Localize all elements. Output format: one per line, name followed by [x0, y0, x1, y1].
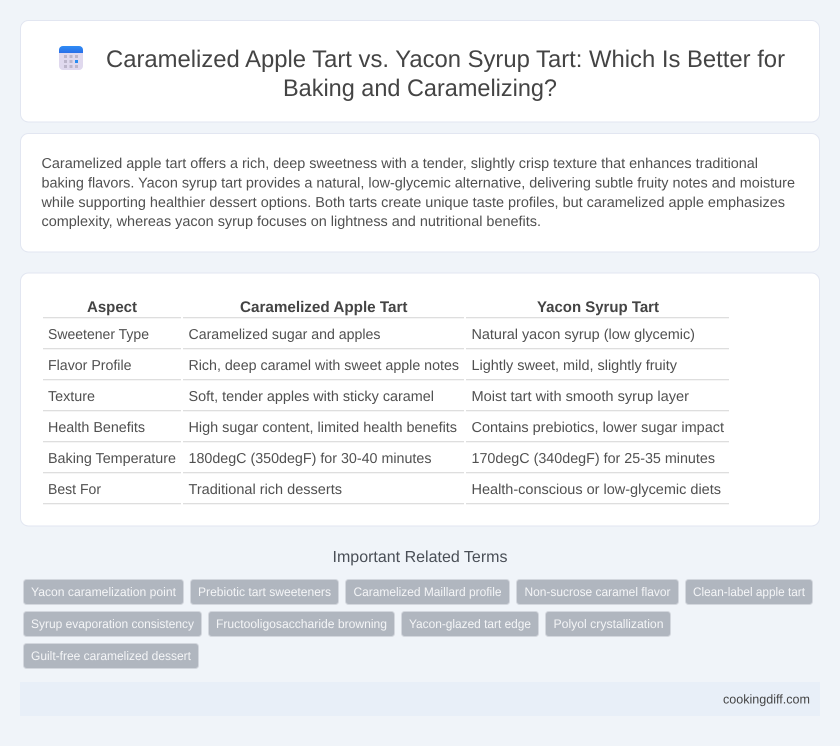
table row: best for: Traditional rich desserts	[188, 482, 342, 498]
title: Baking and Caramelizing?	[283, 75, 557, 102]
tag: Syrup evaporation consistency	[31, 617, 195, 631]
tag: Fructooligosaccharide browning	[216, 617, 387, 631]
tag: Polyol crystallization	[554, 617, 664, 631]
tag list: related terms	[24, 580, 812, 668]
tag	[346, 580, 510, 604]
text block: summary: Caramelized apple tart offers a rich, deep sweetness with a tender, slightly crisp texture that enhances traditional	[42, 156, 758, 172]
table row: texture: Moist tart with smooth syrup layer	[472, 389, 689, 405]
tag	[516, 580, 678, 604]
panel: header	[20, 20, 820, 122]
title: Caramelized Apple Tart vs. Yacon Syrup Tart: Which Is Better for	[106, 46, 785, 73]
tag	[686, 580, 812, 604]
tag: Clean-label apple tart	[693, 585, 806, 599]
table row: flavor profile: Lightly sweet, mild, slightly fruity	[472, 358, 678, 374]
table row: baking temperature	[43, 451, 729, 473]
tag: Guilt-free caramelized dessert	[31, 649, 192, 663]
table row: best for	[43, 482, 729, 504]
panel: description	[20, 134, 820, 252]
tag	[190, 580, 338, 604]
table header row	[43, 299, 729, 318]
table row: best for: Best For	[48, 482, 101, 498]
table row: health benefits: Contains prebiotics, lower sugar impact	[472, 420, 724, 436]
table row: sweetener type: Natural yacon syrup (low glycemic)	[472, 327, 695, 343]
table row: texture: Soft, tender apples with sticky caramel	[188, 389, 434, 405]
table row: baking temperature: 180degC (350degF) for 30-40 minutes	[188, 451, 432, 467]
panel: comparison table	[20, 273, 820, 526]
table row: flavor profile: Rich, deep caramel with sweet apple notes	[188, 358, 459, 374]
tag	[402, 612, 538, 636]
tag	[24, 612, 202, 636]
tag: Yacon caramelization point	[31, 585, 177, 599]
table header row: Aspect	[87, 299, 137, 316]
table row: baking temperature: Baking Temperature	[48, 451, 176, 467]
tag: Yacon-glazed tart edge	[409, 617, 531, 631]
table row: texture	[43, 389, 729, 411]
table row: sweetener type	[43, 327, 729, 349]
table row: health benefits: High sugar content, limited health benefits	[188, 420, 457, 436]
table row: flavor profile	[43, 358, 729, 380]
icon: calendar	[59, 46, 83, 70]
tag	[24, 644, 198, 668]
tag: Non-sucrose caramel flavor	[524, 585, 670, 599]
heading: important related terms: Important Related Terms	[332, 549, 508, 566]
table header row: Yacon Syrup Tart	[537, 299, 659, 316]
tag: Caramelized Maillard profile	[354, 585, 502, 599]
footer: site name: cookingdiff.com	[723, 691, 810, 706]
tag	[546, 612, 670, 636]
table row: texture: Texture	[48, 389, 95, 405]
table row: sweetener type: Caramelized sugar and apples	[188, 327, 380, 343]
text block: summary: baking flavors. Yacon syrup tart provides a natural, low-glycemic alternative, delivering subtle fruity notes and moisture	[42, 176, 795, 192]
table row: best for: Health-conscious or low-glycemic diets	[472, 482, 721, 498]
tag	[24, 580, 184, 604]
text block: summary: while supporting healthier dessert options. Both tarts create unique taste profiles, but caramelized apple emphasizes	[40, 195, 785, 211]
table header row: Caramelized Apple Tart	[240, 299, 408, 316]
tag: Prebiotic tart sweeteners	[198, 585, 331, 599]
table row: sweetener type: Sweetener Type	[48, 327, 149, 343]
text block: summary: complexity, whereas yacon syrup focuses on lightness and nutritional benefits.	[42, 214, 541, 230]
table row: health benefits: Health Benefits	[48, 420, 145, 436]
table row: health benefits	[43, 420, 729, 442]
footer	[20, 682, 820, 716]
tag	[208, 612, 394, 636]
table row: baking temperature: 170degC (340degF) for 25-35 minutes	[472, 451, 715, 467]
table row: flavor profile: Flavor Profile	[48, 358, 132, 374]
